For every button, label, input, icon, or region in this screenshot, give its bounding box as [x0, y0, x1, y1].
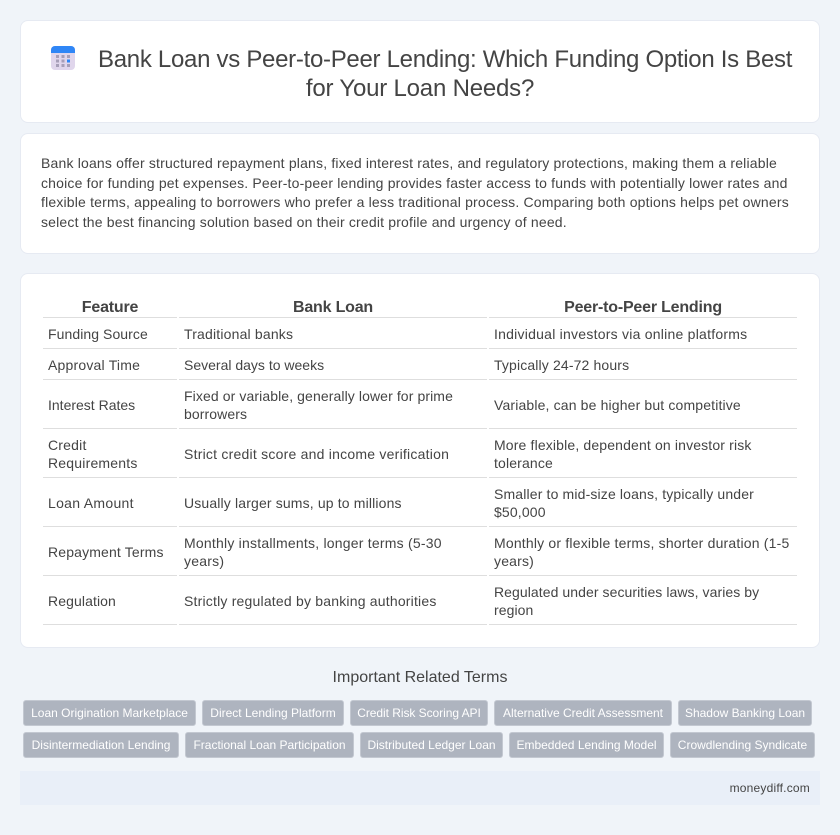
row: interest rates: Interest Rates	[48, 397, 135, 413]
row: credit requirements: tolerance	[494, 455, 553, 471]
related terms tags: Fractional Loan Participation	[193, 738, 346, 752]
row: approval time: Several days to weeks	[184, 357, 324, 373]
row: regulation: Regulated under securities laws, varies by	[494, 584, 759, 600]
footer source: moneydiff.com	[730, 781, 810, 795]
row: loan amount: Usually larger sums, up to millions	[184, 495, 402, 511]
title: Bank Loan vs Peer-to-Peer Lending: Which Funding Option Is Best	[98, 46, 792, 73]
row: funding source: Funding Source	[48, 326, 148, 342]
related terms tags: Shadow Banking Loan	[685, 706, 805, 720]
row: repayment terms: Monthly installments, longer terms (5-30	[184, 535, 442, 551]
related terms tags: Alternative Credit Assessment	[503, 706, 663, 720]
row: approval time: Approval Time	[48, 357, 140, 373]
row: funding source: Individual investors via online platforms	[494, 326, 747, 342]
row: regulation	[48, 584, 760, 618]
intro text: flexible terms, appealing to borrowers who prefer a less traditional process. Comparing both options helps pet owners	[41, 194, 789, 210]
row: approval time: Typically 24-72 hours	[494, 357, 629, 373]
intro text	[41, 155, 789, 230]
row: loan amount: Loan Amount	[48, 495, 134, 511]
row: funding source: Traditional banks	[184, 326, 293, 342]
related terms tags: Disintermediation Lending	[32, 738, 170, 752]
row: credit requirements: Credit	[48, 437, 87, 453]
row: regulation: Strictly regulated by banking authorities	[184, 593, 437, 609]
related terms tags	[23, 700, 815, 758]
related terms tags: Crowdlending Syndicate	[678, 738, 807, 752]
related terms tags: Direct Lending Platform	[210, 706, 336, 720]
heading: related terms: Important Related Terms	[333, 669, 507, 686]
row: repayment terms: Monthly or flexible terms, shorter duration (1-5	[494, 535, 789, 551]
row: credit requirements: More flexible, dependent on investor risk	[494, 437, 752, 453]
panel: introduction	[20, 133, 820, 254]
table header: Bank Loan	[293, 299, 373, 316]
related terms tags: Distributed Ledger Loan	[367, 738, 496, 752]
row: credit requirements: Strict credit score and income verification	[184, 446, 449, 462]
panel: comparison table	[20, 273, 820, 648]
related terms tags: Credit Risk Scoring API	[357, 706, 481, 720]
title	[98, 46, 792, 102]
table header: Feature	[82, 299, 138, 316]
row: credit requirements: Requirements	[48, 455, 138, 471]
row: approval time	[48, 357, 629, 373]
row: interest rates: Variable, can be higher but competitive	[494, 397, 741, 413]
row: repayment terms: years)	[184, 553, 224, 569]
intro text: Bank loans offer structured repayment plans, fixed interest rates, and regulatory protections, making them a reliable	[41, 155, 777, 171]
row: credit requirements	[48, 437, 752, 471]
row: repayment terms: years)	[494, 553, 534, 569]
table header: Peer-to-Peer Lending	[564, 299, 722, 316]
table header	[82, 299, 722, 316]
row: interest rates: borrowers	[184, 406, 247, 422]
related terms tags: Loan Origination Marketplace	[31, 706, 188, 720]
row: loan amount: Smaller to mid-size loans, typically under	[494, 486, 754, 502]
title: for Your Loan Needs?	[306, 75, 534, 102]
row: loan amount: $50,000	[494, 504, 546, 520]
row: repayment terms	[48, 535, 789, 569]
footer bar	[20, 771, 820, 805]
intro text: choice for funding pet expenses. Peer-to-peer lending provides faster access to funds with potentially lower rates and	[41, 174, 788, 190]
row: regulation: Regulation	[48, 593, 116, 609]
panel: title header	[20, 20, 820, 123]
row: repayment terms: Repayment Terms	[48, 544, 164, 560]
row: loan amount	[48, 486, 754, 520]
row: funding source	[48, 326, 747, 342]
intro text: select the best financing solution based on their credit profile and urgency of need.	[41, 214, 567, 230]
related terms tags: Embedded Lending Model	[516, 738, 657, 752]
row: interest rates	[48, 388, 741, 422]
row: interest rates: Fixed or variable, generally lower for prime	[184, 388, 453, 404]
row: regulation: region	[494, 602, 533, 618]
icon: calendar	[51, 46, 75, 70]
